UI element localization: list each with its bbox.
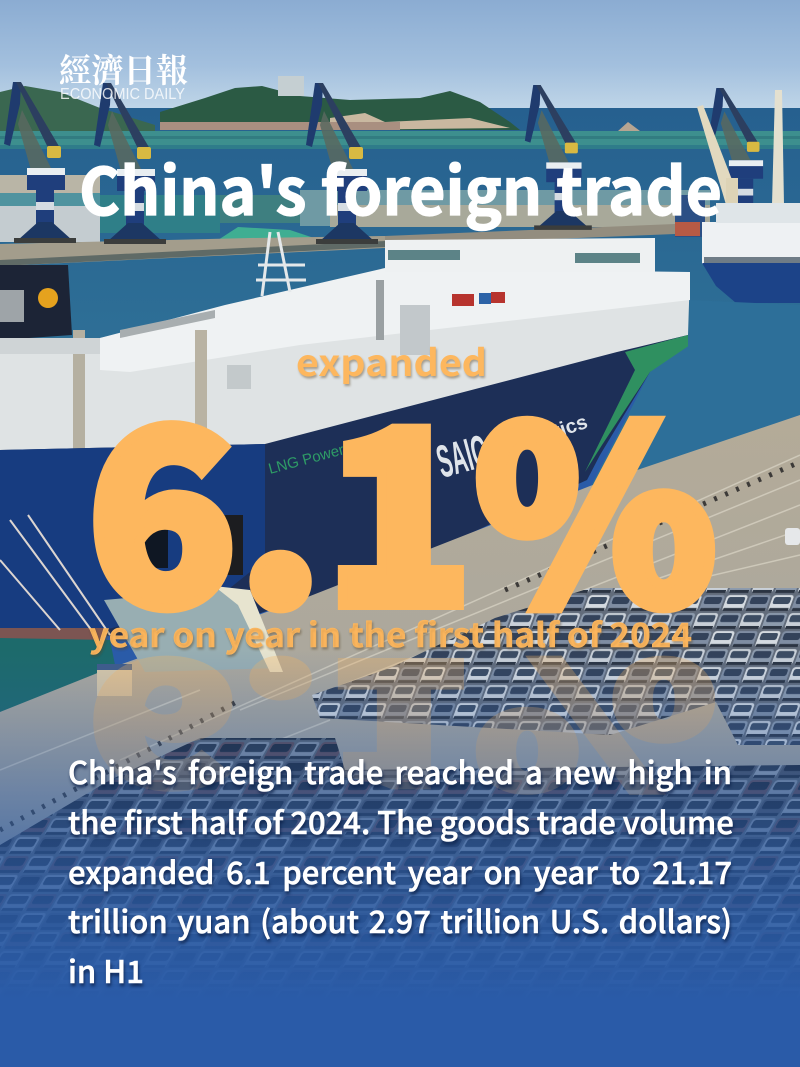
harbour cranes	[4, 82, 784, 244]
sky	[0, 0, 800, 110]
lower-left water	[0, 638, 118, 712]
quay markings	[0, 455, 800, 850]
body text: China's foreign trade reached a new high in	[68, 748, 732, 793]
teal fish-farm band	[0, 131, 800, 149]
guard booth	[97, 664, 132, 696]
big number 6.1%: 6.1%	[87, 323, 717, 675]
right background ship	[702, 203, 800, 303]
label: expanded: expanded	[296, 333, 487, 387]
body text: trillion yuan (about 2.97 trillion U.S. dollars)	[68, 897, 732, 942]
ramp edges	[214, 586, 283, 672]
ship lettering: logistics: tics	[551, 411, 590, 443]
background port buildings and quay	[0, 175, 710, 266]
quay	[0, 415, 800, 1067]
water beside bow	[590, 300, 800, 488]
blue gradient overlay	[0, 650, 800, 1067]
parked car on the quay	[785, 528, 800, 545]
logo: Economic Daily: ECONOMIC DAILY	[60, 86, 185, 103]
ship lettering: SAIC	[431, 424, 493, 488]
body text: expanded 6.1 percent year on year to 21.17	[68, 848, 732, 893]
body text: the first half of 2024. The goods trade volume	[68, 798, 734, 843]
distant islands	[0, 76, 640, 132]
vehicle ramp	[104, 590, 280, 672]
sea	[0, 108, 800, 368]
logo: Economic Daily: 經濟日報	[59, 45, 188, 92]
title: China's foreign trade	[79, 140, 722, 234]
parked cars lower block	[0, 738, 800, 1010]
body text: in H1	[68, 947, 144, 992]
mirrored ghost of 6.1%: 6.1%	[87, 612, 717, 860]
LNG lettering: LNG Powered	[267, 437, 362, 478]
parked cars upper block	[312, 588, 800, 745]
cone rows	[0, 462, 800, 830]
subtitle: year on year: year on year in the first half of 2024	[89, 609, 692, 657]
main ship superstructure	[0, 232, 690, 460]
main ship hull	[0, 335, 688, 640]
